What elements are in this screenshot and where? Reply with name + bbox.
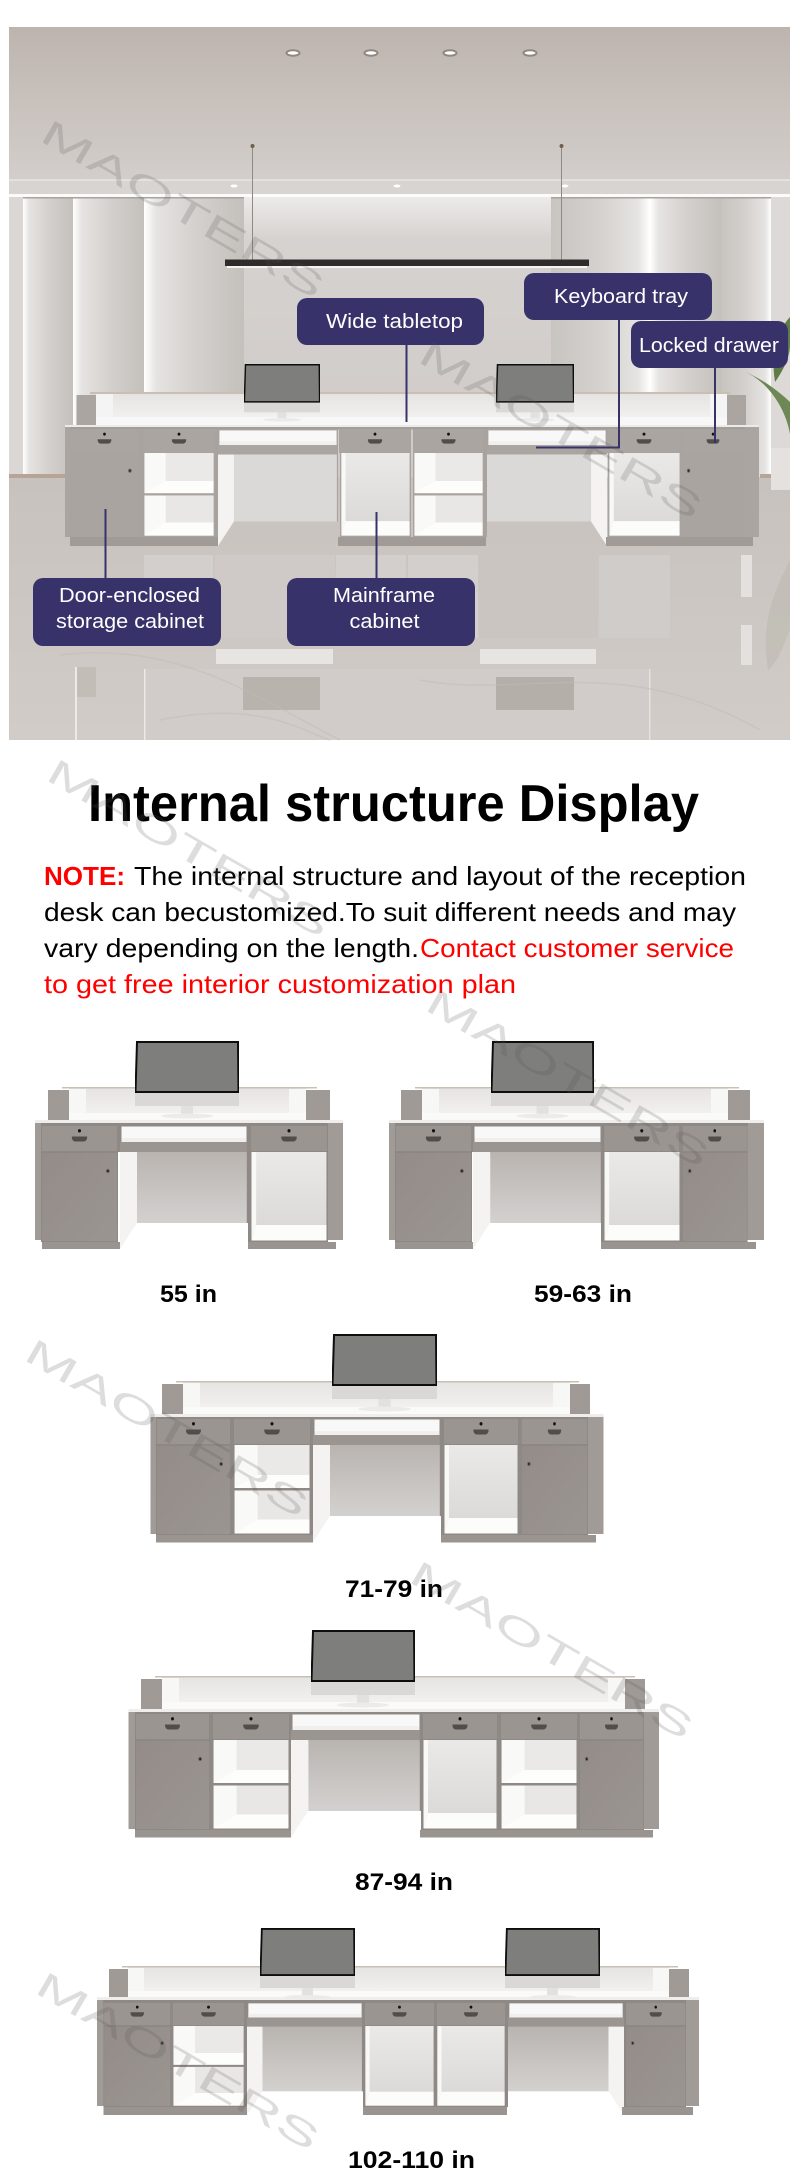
label: 102-110 in: 102-110 in: [348, 2147, 475, 2174]
desk upper counter: [65, 392, 759, 428]
label: 59-63 in: 59-63 in: [534, 1281, 632, 1308]
note text block: Contact customer service: [420, 933, 734, 963]
wall panels: [9, 194, 790, 477]
callout: wide tabletop: [297, 298, 484, 422]
callout: mainframe cabinet: Mainframe: [333, 585, 435, 607]
watermarks: MAOTERS: [40, 750, 338, 946]
callout: door-enclosed storage cabinet: Door-enclosed: [59, 585, 200, 607]
note text block: vary depending on the length.: [44, 933, 419, 963]
callout: wide tabletop: Wide tabletop: [326, 311, 463, 333]
panel: hero photo of reception desk: [9, 27, 790, 740]
monitors: [244, 365, 574, 422]
label: 87-94 in: 87-94 in: [355, 1869, 453, 1896]
callout: keyboard tray: Keyboard tray: [554, 286, 688, 308]
desk: 102-110 in: [97, 1929, 699, 2115]
note text block: The internal structure and layout of the reception: [134, 861, 746, 891]
watermarks: MAOTERS: [403, 1552, 701, 1748]
desk: 55 in: [35, 1042, 343, 1249]
callout: keyboard tray: [524, 273, 712, 448]
title: Internal structure Display: [88, 775, 699, 833]
label: 55 in: 55 in: [160, 1281, 217, 1308]
plant: [745, 317, 790, 670]
desk: 71-79 in: [150, 1335, 604, 1542]
watermarks: MAOTERS: [34, 111, 332, 307]
note text block: NOTE:: [44, 861, 125, 891]
desk: 87-94 in: [128, 1631, 659, 1838]
watermarks: MAOTERS: [419, 980, 717, 1176]
callout: door-enclosed storage cabinet: storage cabinet: [56, 611, 204, 633]
drawers and cabinets: [70, 429, 745, 546]
callout: door-enclosed storage cabinet: [33, 509, 221, 646]
ceiling: [9, 27, 790, 179]
watermarks: MAOTERS: [18, 1330, 316, 1526]
downlights: [286, 50, 536, 56]
callout: locked drawer: Locked drawer: [639, 335, 779, 357]
label: 71-79 in: 71-79 in: [345, 1576, 443, 1603]
callout: mainframe cabinet: [287, 512, 475, 646]
pendant lamp: [225, 144, 589, 268]
note text block: [44, 861, 746, 999]
watermarks: MAOTERS: [412, 332, 710, 528]
callout: mainframe cabinet: cabinet: [350, 611, 420, 633]
desk body: [65, 427, 759, 546]
note text block: to get free interior customization plan: [44, 969, 516, 999]
floor: [9, 474, 790, 740]
desk: 59-63 in: [389, 1042, 764, 1249]
callout: locked drawer: [631, 321, 788, 443]
watermarks: MAOTERS: [29, 1963, 327, 2159]
note text block: desk can becustomized.To suit different needs and may: [44, 897, 736, 927]
